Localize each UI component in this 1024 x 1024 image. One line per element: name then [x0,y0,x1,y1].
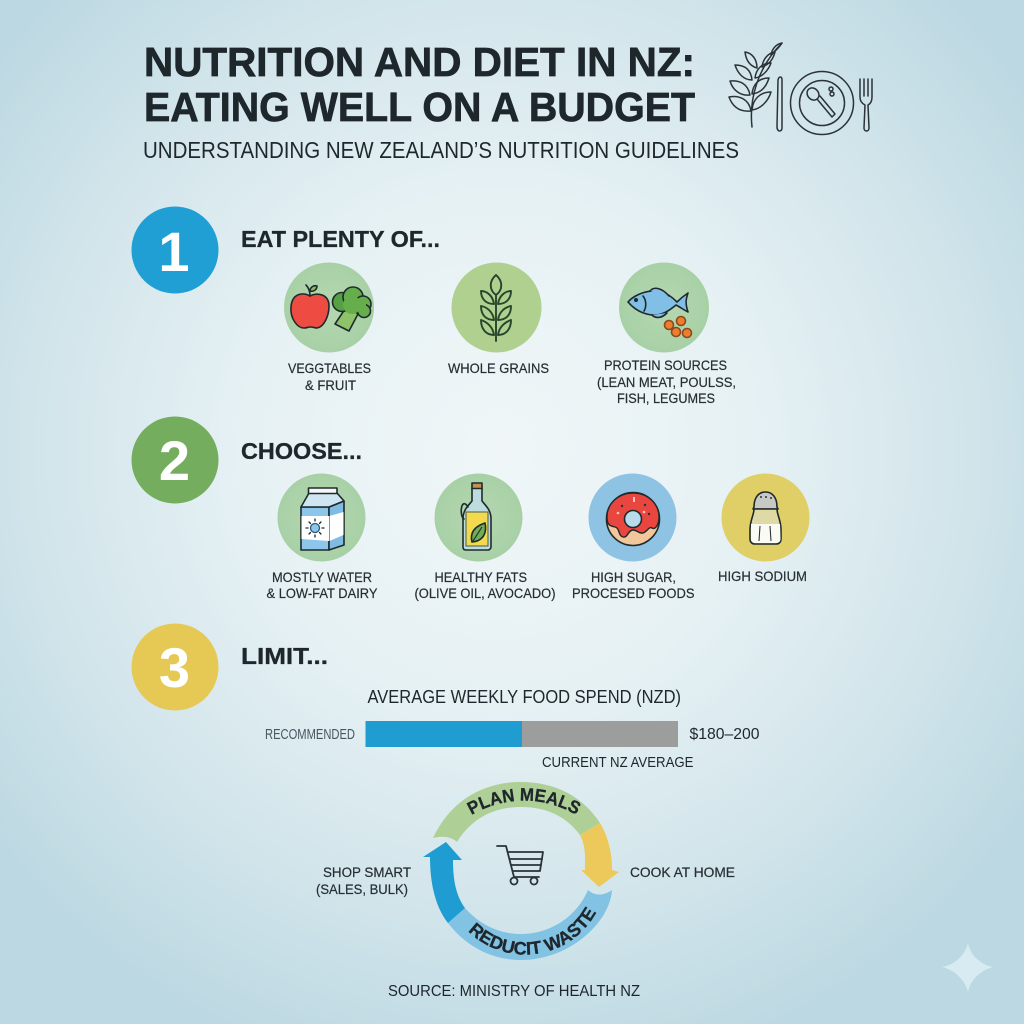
label: vegetables and fruit: & FRUIT [305,377,356,393]
label: shop smart: SHOP SMART [323,864,411,880]
title: NUTRITION AND DIET IN NZ: [144,39,695,85]
label: protein sources: PROTEIN SOURCES [604,357,727,373]
icon: shopping cart [497,846,543,884]
title [144,39,695,130]
label: protein sources: (LEAN MEAT, POULSS, [597,374,736,390]
current average label: CURRENT NZ AVERAGE [542,755,694,771]
icon: whole grains [452,262,542,352]
label: healthy fats: HEALTHY FATS [434,569,527,585]
current average bar [522,721,678,747]
label: high sugar: HIGH SUGAR, [591,569,676,585]
icon: wheat, knife, plate and fork [729,43,872,134]
heading: eat plenty of: EAT PLENTY OF... [241,226,440,252]
title: EATING WELL ON A BUDGET [144,84,695,130]
icon: olive oil bottle [434,474,522,562]
label: water and dairy: & LOW-FAT DAIRY [266,585,378,601]
icon: sparkle [942,943,993,992]
label: protein sources: FISH, LEGUMES [617,390,715,406]
heading: choose: CHOOSE... [241,438,362,464]
section 3 badge: 3 [159,636,190,699]
recommended label: RECOMMENDED [265,726,355,743]
value label: $180–200 [690,726,760,743]
label: vegetables and fruit: VEGGTABLES [288,360,371,376]
arc: plan meals [433,782,600,842]
label: cook at home: COOK AT HOME [630,864,735,880]
label: high sodium: HIGH SODIUM [718,568,807,584]
section 3 badge [132,624,218,710]
source: SOURCE: MINISTRY OF HEALTH NZ [388,983,640,1000]
chart title: AVERAGE WEEKLY FOOD SPEND (NZD) [368,687,681,707]
section 1 badge: 1 [158,220,190,283]
icon: salt shaker [722,474,810,562]
label: vegetables and fruit [288,360,371,393]
cycle diagram [316,782,735,960]
bar chart: average weekly food spend [265,687,760,771]
arc label: plan meals: PLAN MEALS [466,788,580,815]
arc label: reduce waste: REDUCIT WASTE [468,906,596,955]
icon: donut [588,474,676,562]
icon: milk carton [278,474,366,562]
heading: limit: LIMIT... [241,643,328,669]
arc: cook at home [580,823,619,887]
label: healthy fats [414,569,556,601]
label: shop smart: (SALES, BULK) [316,881,408,897]
recommended bar [366,721,522,747]
arc: reduce waste [448,890,612,960]
subtitle: UNDERSTANDING NEW ZEALAND’S NUTRITION GUIDELINES [143,137,739,163]
label: water and dairy [266,569,378,601]
label: high sugar [572,569,694,601]
section 2 badge [132,416,218,504]
label: healthy fats: (OLIVE OIL, AVOCADO) [414,585,556,601]
label: high sugar: PROCESED FOODS [572,585,694,601]
section 1 badge [132,206,218,294]
icon: protein sources [619,262,709,352]
label: shop smart [316,864,411,897]
label: protein sources [597,357,736,406]
section 2 badge: 2 [159,429,190,492]
arrow: shop smart [423,842,465,923]
icon: vegetables and fruit [284,262,374,352]
label: water and dairy: MOSTLY WATER [272,569,372,585]
label: whole grains: WHOLE GRAINS [448,360,549,376]
